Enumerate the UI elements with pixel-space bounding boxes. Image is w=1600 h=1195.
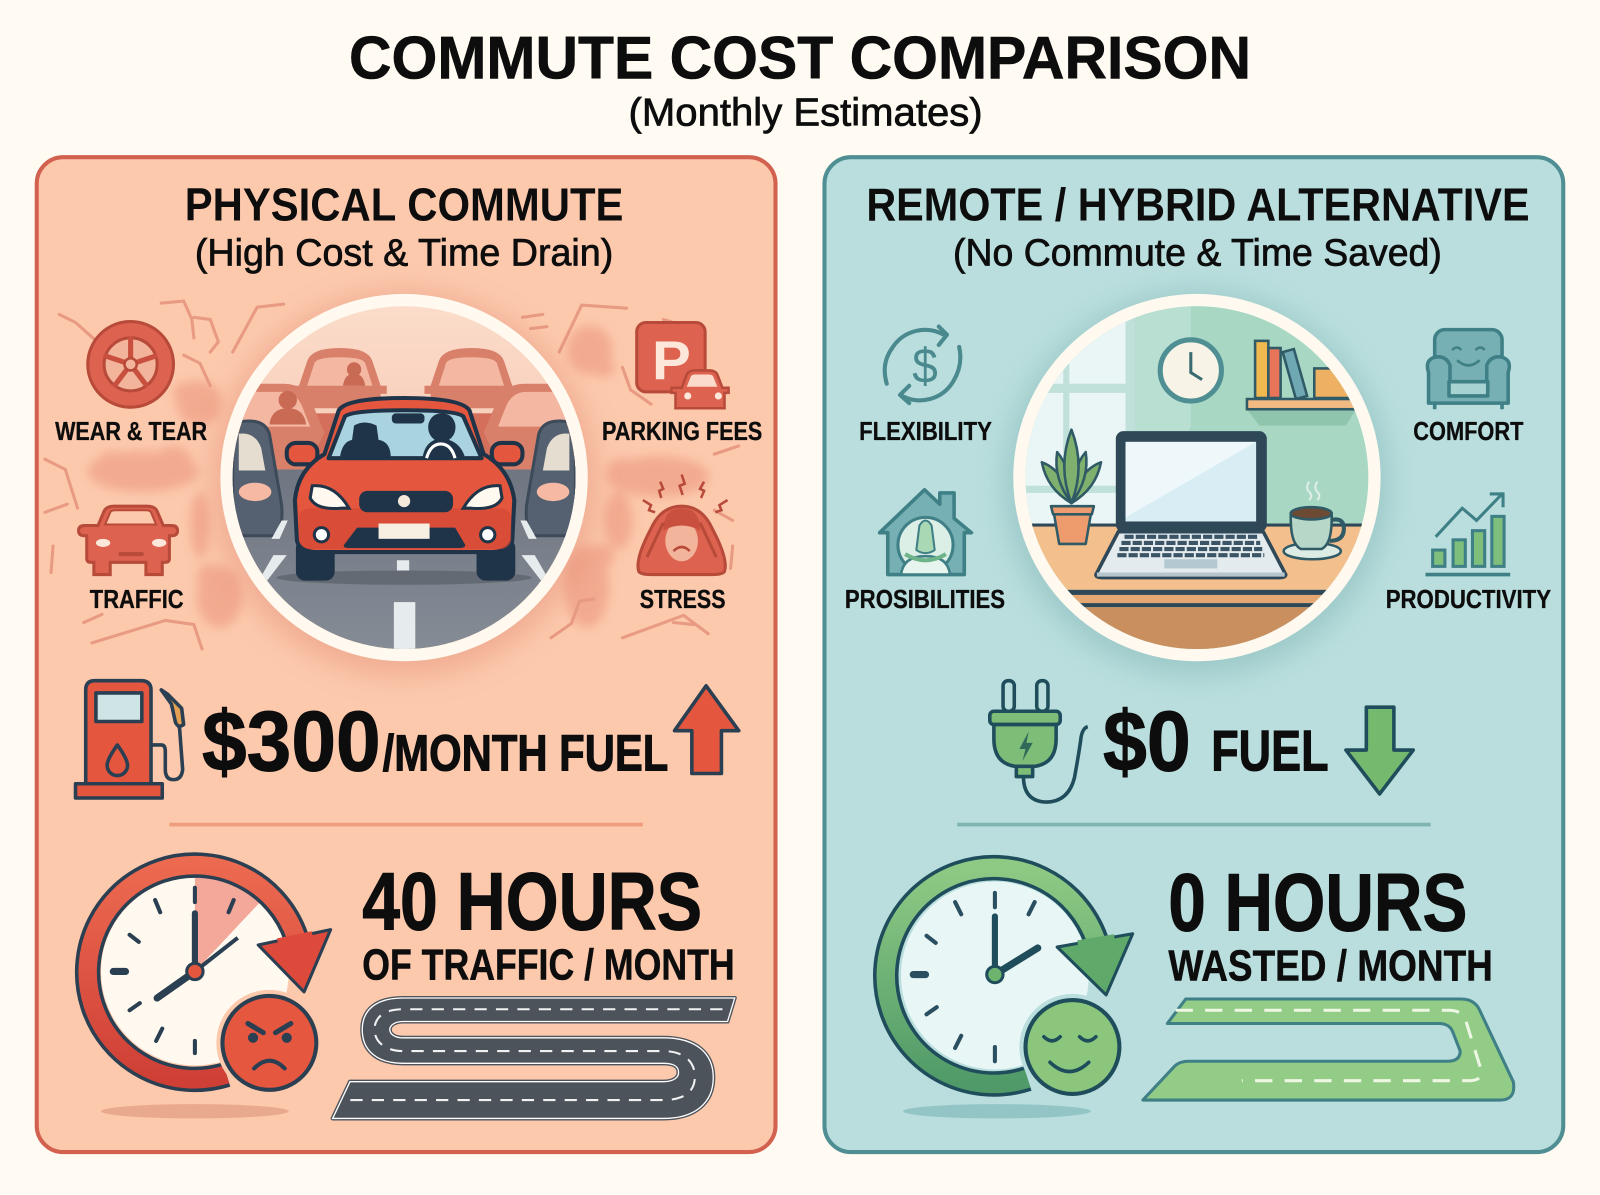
coffee cup [1284, 482, 1344, 559]
occupants [340, 413, 465, 458]
subtitle: (Monthly Estimates) [629, 92, 983, 135]
plant [1042, 430, 1101, 544]
icon: short green road [1143, 999, 1514, 1100]
icon: flexibility money cycle: $ [912, 340, 938, 394]
label: parking fees: PARKING FEES [602, 418, 762, 446]
icon: productivity chart [1426, 493, 1510, 575]
circular scene: home office [1005, 292, 1389, 676]
label: traffic: TRAFFIC [90, 586, 184, 614]
icon: winding road [333, 998, 735, 1118]
stat: 40 hours: 40 HOURS [362, 857, 702, 948]
icon: parking [637, 322, 729, 408]
background cars [233, 348, 576, 469]
icon: calm face [1019, 994, 1126, 1100]
stat label: wasted per month: WASTED / MONTH [1168, 942, 1493, 991]
icon: traffic car [79, 506, 178, 575]
label: flexibility: FLEXIBILITY [859, 418, 992, 446]
stat: 0 hours: 0 HOURS [1168, 858, 1467, 949]
label: productivity: PRODUCTIVITY [1386, 586, 1551, 614]
desk [1024, 525, 1371, 590]
bookshelf [1247, 341, 1357, 426]
icon: flexibility money cycle [885, 327, 960, 403]
heading: remote hybrid: REMOTE / HYBRID ALTERNATIVE [866, 178, 1530, 230]
arrow: fuel cost up [674, 686, 739, 774]
stat label: fuel: FUEL [1211, 719, 1329, 783]
icon: comfort armchair [1427, 330, 1509, 409]
circular scene: traffic [212, 292, 596, 676]
arrow: fuel cost down [1346, 707, 1413, 794]
label: stress: STRESS [640, 586, 726, 614]
icon: parking: P [652, 330, 691, 392]
icon: wear and tear tire [88, 321, 173, 407]
main car [287, 398, 522, 579]
stat label: per month fuel: /MONTH FUEL [383, 724, 668, 781]
clock: 40 hours lost [88, 865, 331, 1118]
road markings [258, 520, 550, 653]
icon: fuel pump [76, 681, 184, 798]
icon: angry face [216, 990, 322, 1096]
panel: remote hybrid alternative [824, 157, 1563, 1152]
wall clock [1160, 340, 1221, 401]
label: comfort: COMFORT [1413, 418, 1524, 446]
panel: physical commute [37, 157, 776, 1152]
clock: zero hours [886, 868, 1133, 1118]
label: prosibilities: PROSIBILITIES [845, 586, 1005, 614]
subheading: high cost: (High Cost & Time Drain) [195, 231, 613, 273]
smoke and cracks backdrop [45, 301, 739, 649]
side cars [233, 421, 282, 536]
title: COMMUTE COST COMPARISON [349, 25, 1251, 92]
icon: house possibilities [880, 490, 971, 575]
stat: 300 dollars fuel: $300 [202, 693, 381, 789]
stat label: of traffic per month: OF TRAFFIC / MONTH [362, 941, 735, 990]
label: wear and tear: WEAR & TEAR [55, 418, 207, 446]
lights and grille [310, 486, 349, 509]
heading: physical commute: PHYSICAL COMMUTE [185, 178, 623, 230]
icon: electric plug [990, 681, 1088, 802]
laptop [1096, 433, 1286, 578]
subheading: no commute: (No Commute & Time Saved) [953, 231, 1442, 273]
icon: stress person [638, 475, 728, 575]
stat: zero dollars: $0 [1103, 693, 1191, 789]
